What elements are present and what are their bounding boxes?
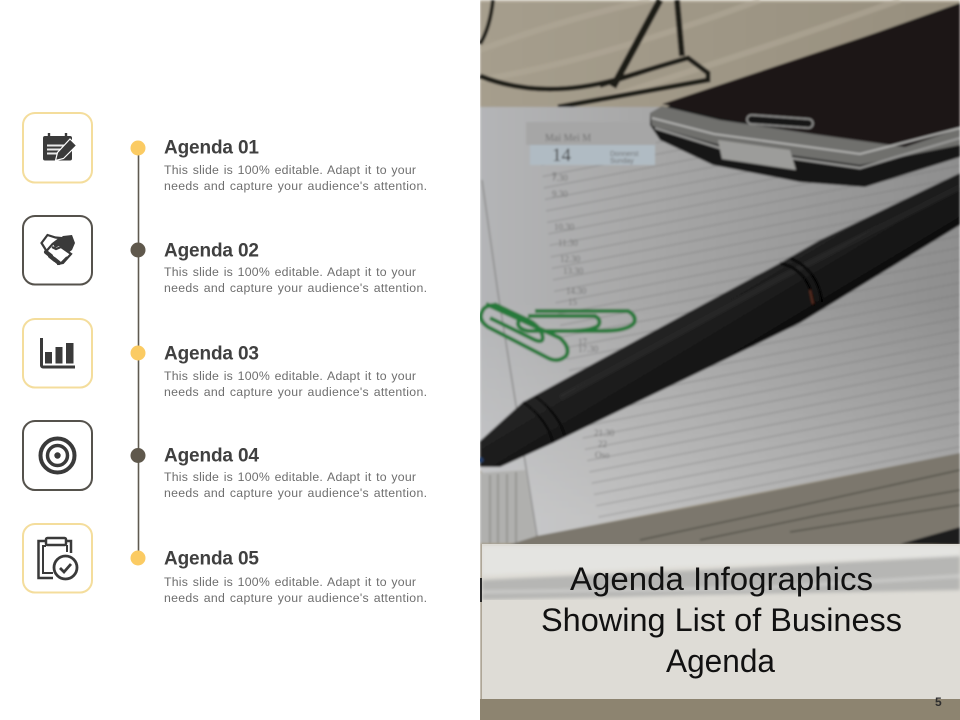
photo: open planner page: 7 — [552, 171, 557, 181]
heading 01: Agenda 01 — [164, 138, 259, 158]
description 02: This slide is 100% editable. Adapt it to your — [164, 265, 416, 279]
icon: calendar with pencil — [43, 133, 76, 160]
description 02: needs and capture your audience's attention. — [164, 281, 427, 295]
photo: open planner page: 17 — [578, 337, 588, 347]
description 03 — [164, 369, 427, 399]
title: Agenda — [666, 643, 775, 679]
photo: open planner page: 22 — [598, 439, 607, 449]
photo: page stack at left — [480, 470, 537, 543]
photo: open planner page: 14 — [552, 145, 572, 166]
description 01 — [164, 163, 427, 193]
description 01: This slide is 100% editable. Adapt it to your — [164, 163, 416, 177]
icon box 05 — [23, 524, 92, 592]
icon box 02 — [23, 216, 92, 284]
icon box 01 — [23, 113, 92, 182]
photo: table below the title — [480, 699, 960, 720]
photo: pen — [478, 173, 960, 467]
description 04 — [164, 470, 427, 500]
icon: bar chart — [42, 338, 75, 367]
photo: glasses — [480, 0, 708, 107]
description 03: This slide is 100% editable. Adapt it to your — [164, 369, 416, 383]
timeline dot 04 — [130, 448, 146, 463]
photo: open planner page: 14.30 — [566, 286, 587, 296]
heading 05: Agenda 05 — [164, 548, 259, 570]
photo: open planner page: 7.30 — [552, 173, 568, 183]
page number: 5 — [935, 695, 942, 709]
heading 04: Agenda 04 — [164, 446, 259, 466]
photo: open planner page — [480, 60, 960, 536]
agenda item 02 — [23, 216, 427, 295]
panel: title banner — [480, 544, 960, 699]
icon box 03 — [23, 319, 92, 388]
heading 02: Agenda 02 — [164, 240, 259, 262]
description 05: needs and capture your audience's attention. — [164, 591, 427, 605]
photo: open planner page: Mai Mei M — [545, 133, 591, 144]
description 05 — [164, 575, 427, 605]
description 04: needs and capture your audience's attention. — [164, 486, 427, 500]
title: Agenda Infographics — [570, 561, 873, 597]
photo: smartphone — [650, 3, 960, 187]
icon: clipboard with check — [38, 538, 77, 579]
title: Showing List of Business — [541, 602, 902, 638]
icon: handshake — [42, 235, 75, 264]
photo: book edge — [505, 453, 960, 546]
timeline dot 05 — [130, 550, 146, 566]
photo: open planner page: 15 — [568, 297, 578, 307]
photo: open planner page: 11.30 — [558, 238, 578, 248]
panel: agenda list — [23, 113, 427, 605]
description 05: This slide is 100% editable. Adapt it to your — [164, 575, 416, 589]
timeline dot 02 — [130, 242, 146, 258]
photo: open planner page: Sunday — [610, 158, 634, 165]
timeline dot 03 — [130, 346, 146, 360]
agenda item 03 — [23, 319, 427, 399]
photo: open planner page: 17.30 — [578, 344, 599, 354]
photo: open planner page: Oso — [595, 450, 610, 460]
panel: desk photo — [478, 0, 960, 720]
icon box 04 — [23, 421, 92, 490]
photo: wooden desk — [480, 0, 960, 720]
description 02 — [164, 265, 427, 295]
photo: open planner page: 10.30 — [554, 222, 575, 232]
timeline dot 01 — [130, 140, 146, 156]
photo: open planner page: 9.30 — [552, 189, 568, 199]
description 04: This slide is 100% editable. Adapt it to your — [164, 470, 416, 484]
agenda item 04 — [23, 421, 427, 500]
photo: green paper clips — [481, 304, 635, 360]
description 01: needs and capture your audience's attention. — [164, 179, 427, 193]
photo: open planner page: 13.30 — [563, 266, 584, 276]
photo: open planner page: 12.30 — [560, 254, 581, 264]
agenda item 05 — [23, 524, 427, 605]
timeline connector — [138, 148, 140, 558]
agenda item 01 — [23, 113, 427, 193]
photo: open planner page: 21.30 — [594, 428, 615, 438]
title — [541, 561, 902, 679]
description 03: needs and capture your audience's attention. — [164, 385, 427, 399]
photo: open planner page: Donnerst — [610, 151, 638, 158]
heading 03: Agenda 03 — [164, 344, 259, 364]
icon: target — [40, 438, 74, 472]
